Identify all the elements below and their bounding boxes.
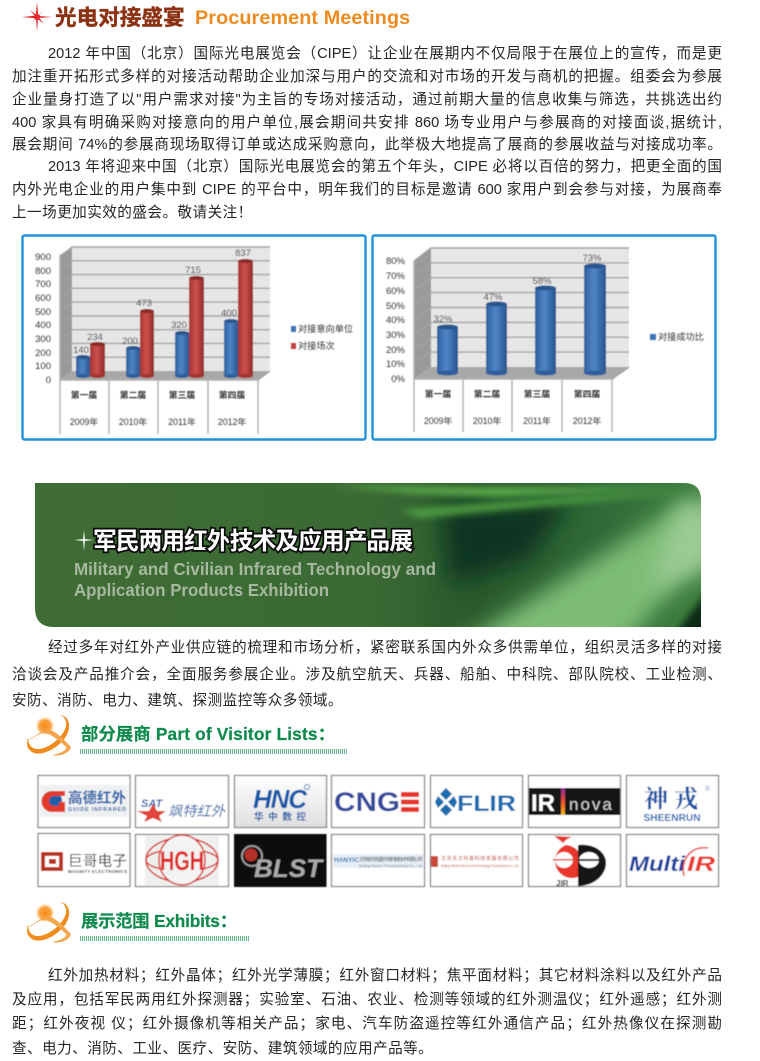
banner star: [74, 530, 94, 551]
banner english title: [74, 559, 436, 600]
category labels: [424, 388, 601, 426]
category labels: 第一届: [425, 388, 451, 399]
y axis labels: 0: [46, 375, 51, 386]
logo: hgh: HGH: [160, 846, 204, 876]
logo: sheenrun: SHEENRUN: [644, 813, 700, 824]
text block: infrared supply chain description: [12, 639, 722, 709]
logo: irnova: [528, 776, 620, 828]
banner chinese title: 军民两用红外技术及应用产品展: [93, 528, 413, 555]
logo: guide infrared: [38, 776, 130, 828]
text block: exhibits scope: 及应用，包括军民两用红外探测器；实验室、石油、农业、检测等领域的红外测温仪；红外遥感；红外测: [12, 992, 722, 1008]
logo: multiir: [626, 834, 718, 886]
logo: magnity electronics: 巨哥电子: [68, 853, 127, 870]
data labels: 200: [122, 336, 138, 347]
section heading: part of visitor lists: [24, 715, 347, 756]
y axis labels: 10%: [386, 359, 406, 370]
legend: 对接意向单位: [298, 323, 353, 334]
text block: exhibits scope: 查、电力、消防、工业、医疗、安防、建筑领域的应用产品等。: [12, 1041, 433, 1057]
text block: introduction paragraphs: 内外光电企业的用户集中到 CIPE 的平台中，明年我们的目标是邀请 600 家用户到会参与对接，为展商奉: [12, 182, 722, 198]
logo: hanyic: HANYIC: [334, 857, 359, 864]
logo: flir: [430, 776, 522, 828]
logo: flir: FLIR: [457, 791, 516, 816]
category labels: 2012年: [218, 416, 246, 427]
data labels: 473: [136, 298, 152, 309]
logo: guide infrared: 高德红外: [68, 789, 126, 807]
logo: jir: [528, 834, 620, 888]
category labels: 2010年: [473, 415, 501, 426]
section header: procurement meetings: [22, 2, 410, 32]
logo: hnc huazhong cnc: [234, 776, 326, 828]
logo: sheenrun: 神戎: [644, 779, 698, 814]
category labels: 第四届: [219, 389, 245, 400]
logo: blst: BLST: [254, 855, 325, 883]
logo: hanyic: 北京航天拓盛光电科技技术有限公司: [359, 856, 423, 863]
category labels: [70, 389, 246, 427]
logo: guide infrared: GUIDE INFRARED: [68, 807, 126, 813]
logo: irnova: nova: [569, 795, 614, 814]
category labels: 第四届: [574, 388, 600, 399]
logo: beijing orient: 北京东方科泰科技发展有限公司: [441, 855, 519, 862]
y axis labels: 600: [35, 293, 51, 304]
text block: introduction paragraphs: 加注重开拓形式多样的对接活动帮助企业加深与用户的交流和对市场的开发与商机的把握。组委会为参展: [12, 69, 722, 85]
logo: hanyic: Beijing Hanyic Photoelectricity Co., Ltd.: [359, 864, 423, 868]
logo grid: exhibitors: [36, 774, 720, 888]
text block: introduction paragraphs: 400 家具有明确采购对接意向的用户单位,展会期间共安排 860 场专业用户与参展商的对接面谈,据统计,: [12, 115, 722, 131]
legend: [291, 323, 353, 351]
heading: english title: Procurement Meetings: [195, 7, 410, 29]
heading text: 部分展商 Part of Visitor Lists：: [81, 724, 335, 744]
y axis labels: 20%: [386, 345, 406, 356]
category labels: 第二届: [120, 389, 146, 400]
y axis labels: 900: [35, 252, 51, 263]
data labels: 32%: [433, 314, 453, 325]
text block: introduction paragraphs: 上一场更加实效的盛会。敬请关注！: [12, 205, 253, 221]
data labels: 58%: [532, 276, 552, 287]
logo: cnge: [332, 776, 424, 828]
text block: introduction paragraphs: 展会期间 74%的参展商现场取得订单或达成采购意向，此举极大地提高了展商的参展收益与对接成功率。: [12, 137, 722, 153]
logo: hanyic: [332, 834, 424, 886]
text block: infrared supply chain description: 安防、消防、电力、建筑、探测监控等众多领域。: [12, 693, 343, 709]
data labels: 73%: [582, 253, 602, 264]
data labels: 837: [235, 248, 251, 259]
y axis labels: 50%: [386, 301, 406, 312]
category labels: 2009年: [424, 415, 452, 426]
data labels: [433, 253, 602, 325]
section heading: exhibits: [24, 902, 249, 942]
logo: multiir: Multi: [629, 853, 686, 876]
data labels: [73, 248, 251, 356]
bars: fourth edition: [224, 259, 253, 378]
logo: sat infrared: 飒特红外: [168, 804, 226, 820]
y axis labels: 200: [35, 348, 51, 359]
category labels: 第一届: [71, 389, 97, 400]
logo: blst: [234, 834, 326, 887]
logo: hgh: [136, 834, 228, 886]
logo: irnova: IR: [531, 790, 555, 817]
text block: exhibits scope: 距；红外夜视 仪；红外摄像机等相关产品；家电、汽车防盗遥控等红外通信产品；红外热像仪在探测勘: [12, 1016, 722, 1032]
logo: magnity electronics: MAGNITY ELECTRONICS: [68, 869, 127, 874]
banner english title: Application Products Exhibition: [74, 580, 329, 600]
text block: infrared supply chain description: 经过多年对红外产业供应链的梳理和市场分析，紧密联系国内外众多供需单位，组织灵活多样的对接: [48, 640, 722, 656]
icon: orange orbit: [24, 902, 71, 942]
category labels: 第三届: [524, 388, 550, 399]
category labels: 第二届: [474, 388, 500, 399]
logo: beijing orient: Beijing Orients Science and Technology Development Co., Ltd.: [441, 864, 519, 868]
logo: cnge: CNG: [334, 787, 400, 817]
text block: introduction paragraphs: [12, 45, 722, 221]
category labels: 第三届: [169, 389, 195, 400]
bars: second edition: [126, 309, 154, 378]
bar chart: buyers and meetings per edition: [21, 234, 367, 441]
logo: jir: JIR: [556, 879, 569, 888]
logo: multiir: IR: [687, 853, 716, 876]
text block: infrared supply chain description: 洽谈会及产品推介会，全面服务参展企业。涉及航空航天、兵器、船舶、中科院、部队院校、工业检测、: [12, 667, 722, 683]
logo: sat infrared: [136, 776, 228, 828]
y axis labels: 30%: [386, 330, 406, 341]
bars: first edition: [76, 342, 105, 378]
category labels: 2011年: [168, 416, 196, 427]
y axis labels: [386, 256, 406, 385]
data labels: 320: [171, 320, 187, 331]
text block: exhibits scope: 红外加热材料；红外晶体；红外光学薄膜；红外窗口材料；焦平面材料；其它材料涂料以及红外产品: [48, 968, 722, 984]
text block: introduction paragraphs: 2013 年将迎来中国（北京）国际光电展览会的第五个年头，CIPE 必将以百倍的努力，把更全面的国: [48, 159, 722, 175]
data labels: 140: [73, 345, 89, 356]
y axis labels: [35, 252, 51, 386]
heading text: 展示范围 Exhibits：: [81, 911, 237, 931]
logo: hnc huazhong cnc: 华中数控: [254, 811, 306, 823]
category labels: 2012年: [573, 415, 601, 426]
heading underline: [80, 749, 347, 754]
y axis labels: 800: [35, 266, 51, 277]
category labels: 2010年: [119, 416, 147, 427]
heading underline: [80, 936, 249, 941]
y axis labels: 700: [35, 279, 51, 290]
legend: 对接场次: [298, 340, 335, 351]
logo: sheenrun: ®: [705, 785, 711, 793]
y axis labels: 300: [35, 334, 51, 345]
logo: hnc huazhong cnc: HNC: [253, 784, 308, 814]
text block: introduction paragraphs: 2012 年中国（北京）国际光电展览会（CIPE）让企业在展期内不仅局限于在展位上的宣传，而是更: [48, 46, 722, 62]
bars: success rate: [437, 264, 606, 376]
bars: third edition: [175, 276, 204, 378]
data labels: 400: [221, 308, 237, 319]
banner: military and civilian infrared exhibition: [35, 483, 701, 627]
data labels: 47%: [483, 292, 503, 303]
y axis labels: 100: [35, 361, 51, 372]
icon: red star burst: [22, 2, 52, 32]
category labels: 2009年: [70, 416, 98, 427]
icon: orange orbit: [24, 715, 71, 755]
y axis labels: 0%: [391, 374, 406, 385]
y axis labels: 70%: [386, 271, 406, 282]
logo: sat infrared: SAT: [141, 798, 163, 810]
bar chart: success rate per edition: [371, 234, 717, 441]
y axis labels: 80%: [386, 256, 406, 267]
y axis labels: 40%: [386, 315, 406, 326]
y axis labels: 400: [35, 320, 51, 331]
y axis labels: 500: [35, 307, 51, 318]
legend: 对接成功比: [658, 331, 704, 342]
category labels: 2011年: [523, 415, 551, 426]
heading: chinese title: 光电对接盛宴: [55, 5, 185, 30]
data labels: 234: [87, 332, 103, 343]
text block: introduction paragraphs: 企业量身打造了以"用户需求对接"为主旨的专场对接活动，通过前期大量的信息收集与筛选，共挑选出约: [12, 92, 722, 108]
logo: beijing orient: [430, 834, 522, 886]
logo: sheenrun: [626, 776, 718, 828]
data labels: 715: [185, 265, 201, 276]
y axis labels: 60%: [386, 286, 406, 297]
logo: magnity electronics: [38, 834, 130, 886]
banner english title: Military and Civilian Infrared Technology and: [74, 559, 436, 579]
